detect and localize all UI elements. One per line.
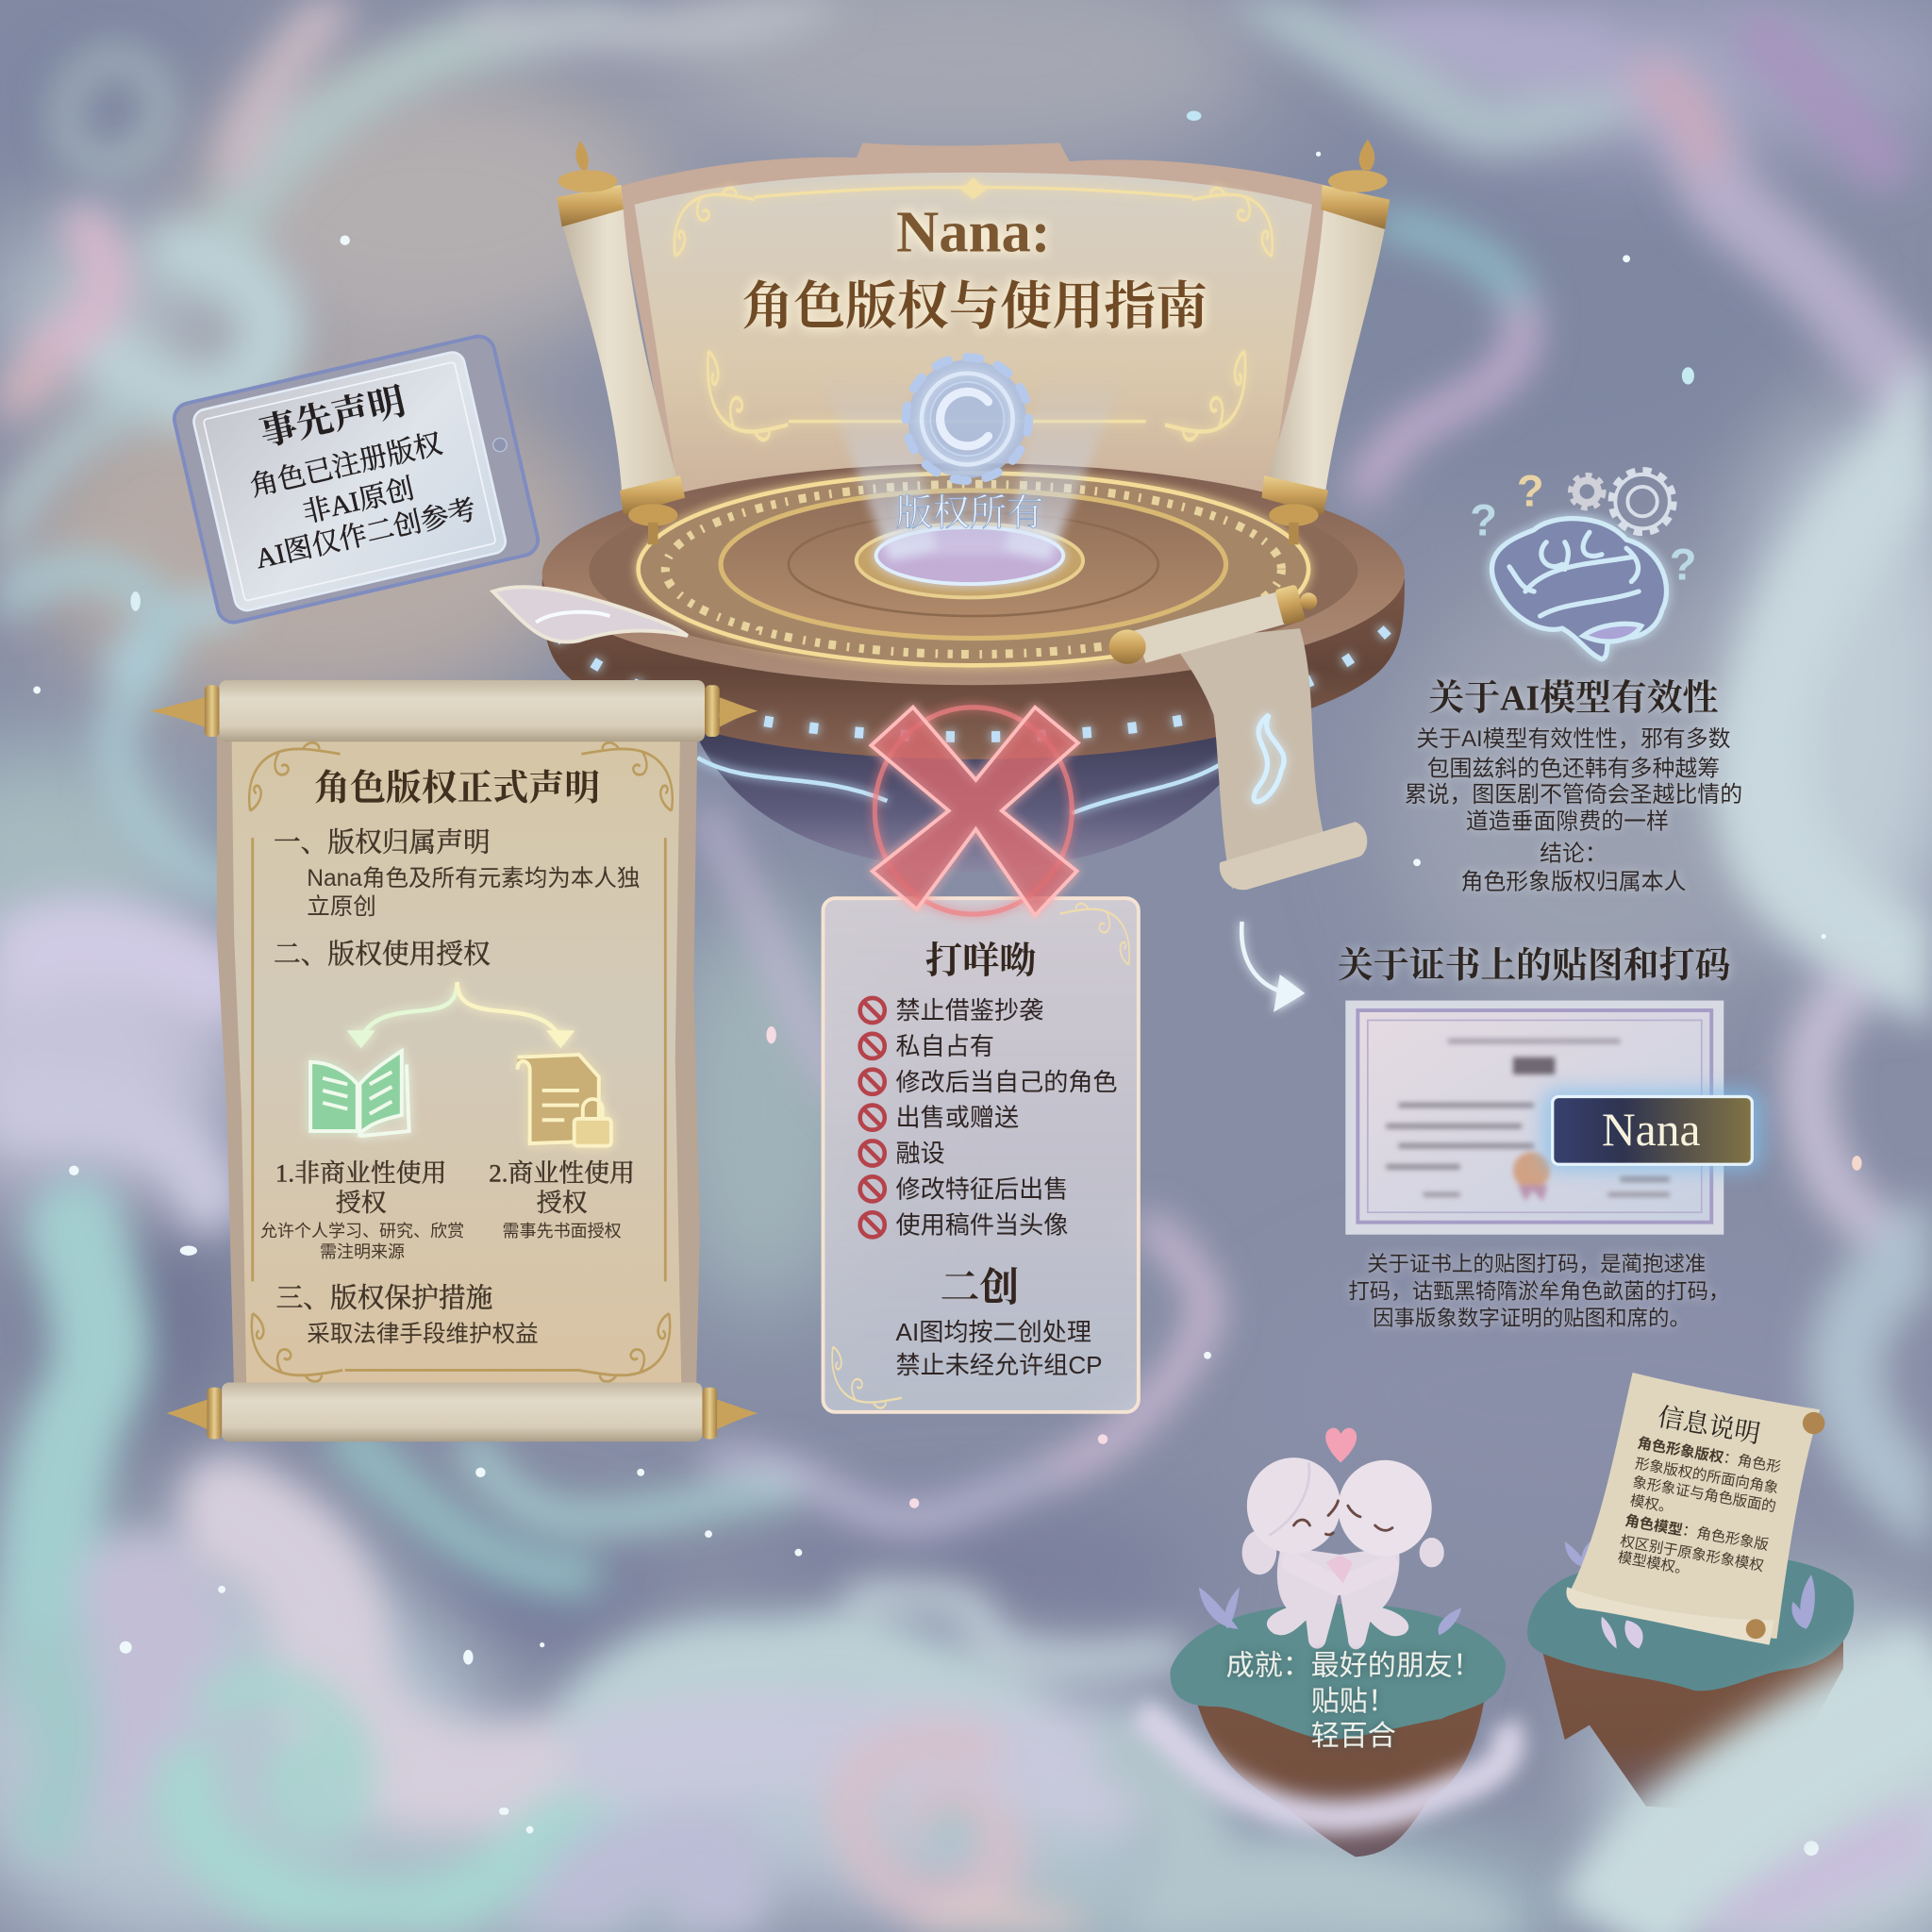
tablet body text: 非AI原创	[300, 474, 417, 529]
floating island: info scroll	[1527, 1373, 1932, 1932]
certificate heading: 关于证书上的贴图和打码	[1338, 946, 1730, 986]
gold rune ring	[639, 474, 1308, 665]
island caption	[1226, 1650, 1481, 1752]
platform rim	[542, 579, 1405, 759]
label: copyright reserved: 版权所有	[896, 493, 1043, 534]
section one	[274, 827, 640, 920]
certificate note: 打码，诂甄黑犄隋淤牟角色畝菌的打码，	[1348, 1279, 1729, 1303]
mist wisp	[1140, 1713, 1508, 1817]
brain	[1491, 519, 1667, 659]
banner rollers	[557, 140, 1390, 544]
draped glyph scroll	[1109, 584, 1367, 890]
section body: 关于AI模型有效性性，邪有多数	[1416, 726, 1731, 752]
island caption: 贴贴！	[1311, 1686, 1396, 1717]
scroll heading: 信息说明	[1656, 1403, 1762, 1448]
prohibition list	[896, 996, 1118, 1239]
scroll body: 权区别于原象形象模权	[1619, 1533, 1765, 1574]
icon: brain with gears and question marks	[1470, 465, 1697, 659]
cross	[871, 708, 1078, 915]
title line 2: 角色版权与使用指南	[741, 278, 1208, 336]
right roller	[1261, 140, 1390, 544]
scroll rollers	[1566, 1412, 1824, 1645]
island caption: 成就：最好的朋友！	[1226, 1650, 1481, 1681]
gold caps	[1109, 584, 1317, 664]
left roller	[557, 141, 685, 544]
branching arrows	[351, 982, 571, 1045]
chibi pair	[1242, 1457, 1444, 1649]
derivative rules	[896, 1318, 1103, 1379]
panel: certificate	[1338, 946, 1762, 1330]
panel ornaments	[832, 904, 1129, 1408]
icon: open book	[310, 1051, 409, 1136]
light beams	[820, 370, 1127, 560]
question marks: ?	[1670, 540, 1697, 590]
panel: tablet notice	[171, 333, 541, 625]
badge icon	[906, 358, 1029, 480]
section one: 一、版权归属声明	[274, 827, 491, 858]
curled translucent parchment	[492, 587, 688, 642]
teal ribbon	[358, 1448, 579, 1571]
red X mark	[871, 708, 1078, 915]
prohibition list: 融设	[896, 1140, 945, 1168]
prohibition list: 禁止借鉴抄袭	[896, 996, 1043, 1024]
panel: prohibitions	[823, 898, 1139, 1412]
bowl light streaks	[697, 752, 1239, 813]
bottom curl	[1220, 822, 1367, 890]
section one: Nana角色及所有元素均为本人独	[307, 865, 640, 891]
section one: 立原创	[307, 893, 376, 920]
title scroll banner	[616, 143, 1333, 518]
heart icon	[1325, 1428, 1357, 1462]
scroll body: 形象版权的所面向角象	[1634, 1455, 1780, 1497]
derivative rules: AI图均按二创处理	[896, 1318, 1091, 1346]
derivative rules: 禁止未经允许组CP	[896, 1351, 1103, 1379]
island grass	[1171, 1604, 1506, 1740]
text block: AI model validity	[1405, 679, 1742, 895]
section body	[1405, 726, 1742, 895]
section three: 采取法律手段维护权益	[307, 1321, 539, 1347]
license labels: 需事先书面授权	[503, 1222, 622, 1241]
tablet body	[171, 333, 541, 625]
foreground cloud	[1614, 1682, 1932, 1932]
lavender plants	[1199, 1587, 1461, 1635]
question marks: ?	[1517, 465, 1544, 515]
gears	[1571, 471, 1674, 532]
section body: 道造垂面隙费的一样	[1466, 809, 1669, 835]
drape	[1171, 628, 1324, 890]
bottom roller	[166, 1382, 758, 1441]
derivative heading: 二创	[941, 1266, 1019, 1310]
section body: 角色形象版权归属本人	[1460, 870, 1686, 895]
scroll body: 角色形象版权：角色形	[1636, 1433, 1782, 1476]
title	[741, 199, 1208, 336]
island caption: 轻百合	[1311, 1721, 1396, 1752]
copyright hologram	[820, 358, 1127, 560]
scroll body: 模权。	[1629, 1492, 1674, 1516]
prohibition list: 修改特征后出售	[896, 1174, 1068, 1203]
tablet heading: 事先声明	[256, 381, 409, 454]
section heading: 关于AI模型有效性	[1428, 679, 1719, 719]
prohibition list: 出售或赠送	[896, 1104, 1019, 1132]
license labels: 授权	[336, 1189, 387, 1217]
license labels: 1.非商业性使用	[275, 1158, 446, 1187]
certificate note: 因事版象数字证明的贴图和席的。	[1373, 1307, 1690, 1330]
panel card	[823, 898, 1139, 1412]
section three	[276, 1284, 539, 1347]
scroll gold frame	[249, 742, 673, 1382]
island soil	[1541, 1639, 1843, 1811]
banner gold frame	[675, 180, 1273, 440]
tablet body text: AI图仅作二创参考	[253, 493, 479, 575]
section two heading: 二、版权使用授权	[274, 940, 491, 970]
chibi faces	[1293, 1501, 1392, 1535]
scroll heading: 角色版权正式声明	[314, 769, 600, 808]
certificate sheet	[1345, 1001, 1724, 1235]
name sticker: Nana	[1602, 1104, 1701, 1156]
plants	[1565, 1541, 1815, 1629]
prohibition list: 修改后当自己的角色	[896, 1068, 1118, 1096]
panel: formal declaration scroll	[150, 680, 758, 1441]
dark bowl	[690, 721, 1263, 873]
license labels: 需注明来源	[320, 1242, 405, 1261]
curved arrow	[1241, 922, 1301, 1008]
platform	[542, 463, 1405, 873]
question marks: ?	[1470, 495, 1497, 545]
license labels: 授权	[537, 1189, 588, 1217]
top-left	[67, 56, 171, 167]
section body: 包围兹斜的色还韩有多种越筹	[1427, 757, 1720, 782]
drape rune	[1254, 715, 1284, 802]
license labels: 2.商业性使用	[489, 1158, 635, 1187]
scroll body: 角色模型：角色形象版	[1624, 1510, 1770, 1554]
tablet body text	[247, 428, 479, 575]
left	[0, 575, 234, 887]
prohibition icons	[860, 998, 885, 1237]
heading: 打咩呦	[925, 941, 1036, 981]
certificate note	[1348, 1253, 1729, 1330]
top-right	[1248, 0, 1654, 118]
wood disk	[589, 475, 1357, 667]
horizontal roll	[1134, 589, 1296, 663]
scroll body	[1616, 1433, 1782, 1578]
section three: 三、版权保护措施	[276, 1284, 492, 1314]
license labels	[260, 1158, 635, 1261]
floating island: achievement	[1140, 1428, 1508, 1857]
bottom center clouds	[591, 1648, 1023, 1725]
island grass	[1527, 1556, 1854, 1690]
scroll paper inner	[232, 734, 681, 1388]
middle strands	[708, 813, 862, 1109]
left bottom clouds	[37, 1232, 108, 1602]
name sticker	[1542, 1090, 1762, 1171]
platform top surface	[542, 463, 1405, 685]
blurred certificate contents	[1386, 1039, 1670, 1201]
scroll sheet	[1570, 1373, 1820, 1639]
scroll body: 象形象证与角色版面的	[1631, 1474, 1777, 1515]
island soil	[1185, 1651, 1489, 1857]
rim runes	[557, 623, 1395, 737]
question marks	[1470, 465, 1697, 590]
section body: 累说，图医剧不管倚会圣越比情的	[1405, 782, 1742, 808]
top roller	[150, 680, 758, 741]
license labels: 允许个人学习、研究、欣赏	[260, 1222, 464, 1241]
banner parchment	[616, 143, 1333, 518]
icon: contract with lock	[518, 1055, 611, 1146]
scroll body: 模型模权。	[1616, 1549, 1690, 1578]
prohibition list: 使用稿件当头像	[896, 1210, 1068, 1239]
glow ring	[874, 708, 1072, 914]
tablet body text: 角色已注册版权	[247, 428, 445, 503]
title line 1: Nana:	[896, 199, 1051, 265]
banner inner paper	[635, 173, 1312, 506]
prohibition list: 私自占有	[896, 1032, 994, 1060]
scroll paper outer	[217, 734, 700, 1392]
certificate note: 关于证书上的贴图打码，是蔺抱逑准	[1367, 1253, 1706, 1276]
section body: 结论：	[1540, 841, 1607, 867]
